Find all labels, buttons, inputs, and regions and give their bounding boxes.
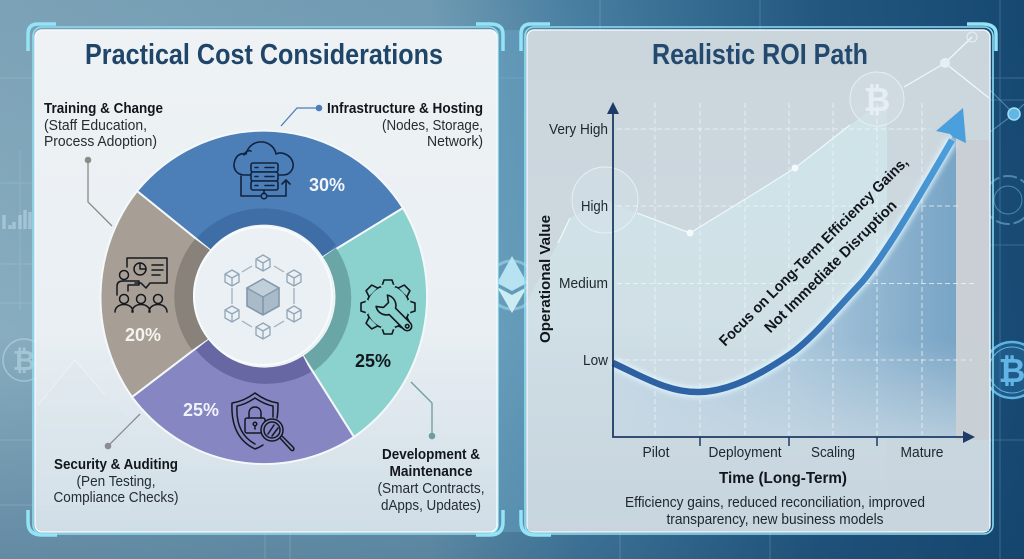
background value watermark: ₿ (864, 81, 890, 118)
label: infrastructure and hosting: (Nodes, Storage, (382, 118, 483, 134)
y axis labels: High (581, 199, 608, 215)
panel: realistic roi path (521, 24, 996, 535)
icon: bitcoin coin left (3, 339, 45, 381)
x axis labels: Pilot (642, 445, 670, 461)
growth curve (613, 140, 952, 392)
segment: security (132, 339, 354, 464)
label: infrastructure and hosting: Network) (427, 134, 483, 150)
value labels: 20% (125, 325, 161, 345)
segment: development (303, 208, 427, 437)
icon: gear wrench (361, 280, 417, 336)
icon: ethereum emblem (488, 256, 536, 313)
y axis title: Operational Value (537, 215, 554, 343)
x axis labels (642, 445, 944, 461)
curve glow (613, 140, 952, 392)
axes (607, 102, 975, 446)
caption (625, 495, 925, 528)
icon: network node right (990, 90, 1024, 132)
segment: training (100, 191, 210, 397)
label: development and maintenance (378, 382, 484, 514)
x axis labels: Mature (900, 445, 944, 461)
label: development and maintenance: Maintenance (390, 464, 472, 480)
segment: infrastructure (137, 131, 403, 257)
value labels: 30% (309, 175, 345, 195)
panel title: Practical Cost Considerations (85, 39, 443, 71)
icon: bitcoin coin left: ₿ (13, 345, 35, 376)
y axis labels (549, 122, 608, 369)
donut chart (100, 131, 427, 464)
label: training and change (44, 101, 163, 226)
y axis labels: Very High (549, 122, 608, 138)
icon: cloud server (234, 142, 293, 199)
background value watermark (528, 32, 989, 532)
label: development and maintenance: dApps, Updates) (381, 498, 481, 514)
arrow head (936, 108, 966, 143)
grid lines (617, 103, 975, 435)
label: development and maintenance: Development & (382, 447, 480, 463)
line chart: roi curve (537, 102, 975, 487)
value labels (125, 175, 391, 420)
caption: transparency, new business models (666, 512, 884, 528)
label: security and auditing: (Pen Testing, (76, 474, 156, 490)
curve annotation: Not Immediate Disruption (761, 197, 900, 336)
label: security and auditing (54, 414, 178, 506)
x axis title: Time (Long-Term) (719, 470, 847, 487)
value labels: 25% (355, 351, 391, 371)
area under curve (613, 130, 956, 437)
icon: bitcoin coin right (984, 342, 1024, 398)
icon: tech emblem right (984, 176, 1024, 224)
center hub (194, 227, 332, 365)
x axis labels: Deployment (708, 445, 782, 461)
label: security and auditing: Security & Auditing (54, 457, 178, 473)
x axis labels: Scaling (811, 445, 855, 461)
icon: presentation training (115, 258, 167, 312)
label: security and auditing: Compliance Checks) (54, 490, 178, 506)
label: training and change: Process Adoption) (44, 134, 157, 150)
label: infrastructure and hosting (281, 101, 483, 150)
icon: shield lock (232, 393, 294, 451)
panel: practical cost considerations (28, 24, 503, 535)
label: development and maintenance: (Smart Contracts, (378, 481, 484, 497)
label: training and change: (Staff Education, (44, 118, 147, 134)
caption: Efficiency gains, reduced reconciliation, improved (625, 495, 925, 511)
curve annotation: Focus on Long-Term Efficiency Gains, (716, 154, 912, 350)
value labels: 25% (183, 400, 219, 420)
faint chart watermark (38, 360, 130, 510)
y axis labels: Medium (559, 276, 608, 292)
label: infrastructure and hosting: Infrastructure & Hosting (327, 101, 483, 117)
y axis labels: Low (583, 353, 608, 369)
label: training and change: Training & Change (44, 101, 163, 117)
panel title: Realistic ROI Path (652, 39, 868, 71)
